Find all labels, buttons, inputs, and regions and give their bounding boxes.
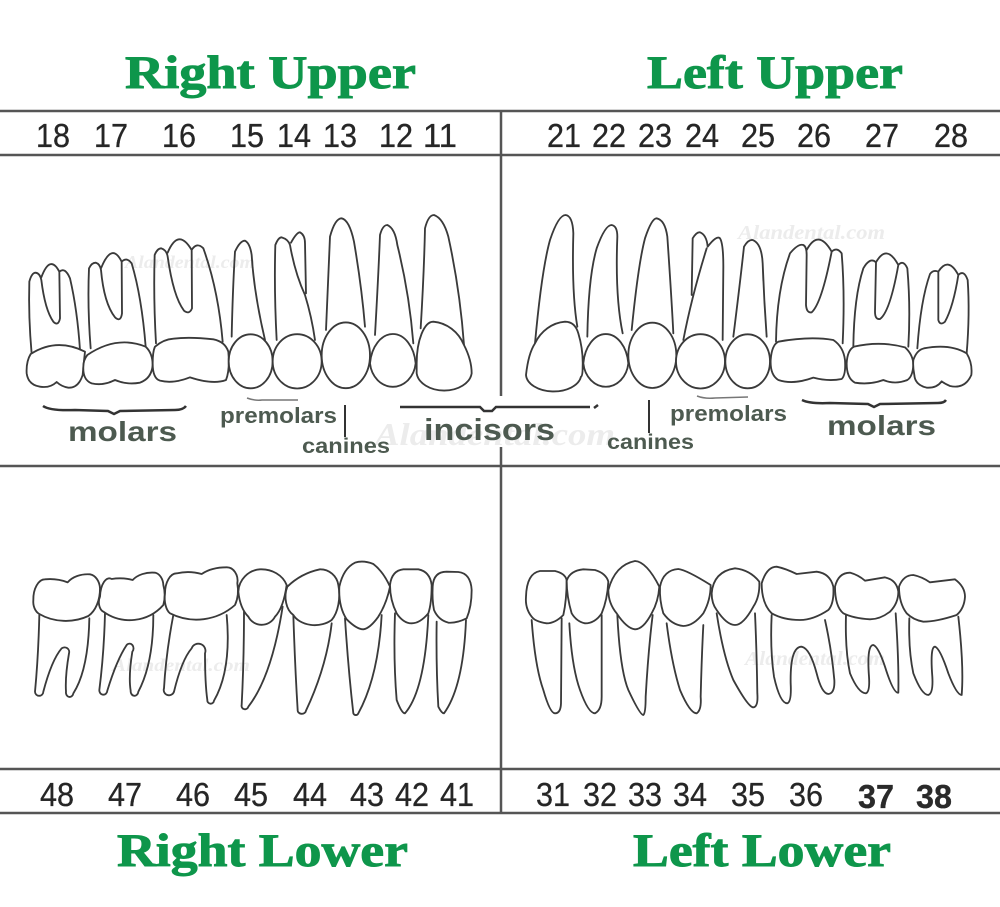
- tooth numbers: lower row: 41: [440, 776, 474, 813]
- heading: Left Upper: Left Upper: [647, 47, 903, 99]
- tooth numbers: upper row: 26: [797, 117, 831, 154]
- tooth numbers: lower row: 35: [731, 776, 765, 813]
- label: molars right upper: molars: [68, 416, 177, 447]
- tooth 26: [771, 240, 845, 382]
- label: incisors: [400, 405, 598, 447]
- tooth 21: [526, 215, 583, 391]
- tooth numbers: lower row: 46: [176, 776, 210, 813]
- tooth numbers: upper row: 25: [741, 117, 775, 154]
- tooth numbers: lower row: 47: [108, 776, 142, 813]
- tooth numbers: upper row: 13: [323, 117, 357, 154]
- tooth 13: [322, 218, 370, 388]
- tooth numbers: upper row: 23: [638, 117, 672, 154]
- upper right quadrant teeth: [27, 215, 472, 391]
- heading: Right Lower: Right Lower: [117, 825, 408, 877]
- tooth 18: [27, 264, 85, 388]
- tooth 34: [660, 569, 711, 713]
- tooth numbers: lower row: 32: [583, 776, 617, 813]
- lower right quadrant teeth: [33, 562, 472, 715]
- tooth 14: [273, 232, 322, 389]
- chart grid lines: [0, 111, 1000, 813]
- tooth 11: [417, 215, 472, 391]
- tooth 37: [835, 573, 898, 693]
- tooth numbers: upper row: 22: [592, 117, 626, 154]
- lower left quadrant teeth: [526, 561, 965, 715]
- tooth numbers: upper row: 17: [94, 117, 128, 154]
- tooth 28: [913, 265, 972, 388]
- tooth 12: [370, 225, 416, 387]
- tooth 15: [229, 241, 273, 388]
- tooth numbers: upper row: 24: [685, 117, 719, 154]
- tooth 36: [762, 567, 834, 703]
- tooth numbers: lower row: [40, 776, 952, 815]
- tooth 35: [712, 568, 759, 707]
- label: canines right upper: [302, 405, 390, 458]
- upper left quadrant teeth: [526, 215, 972, 391]
- tooth numbers: lower row: 36: [789, 776, 823, 813]
- heading: Right Upper: Right Upper: [125, 47, 416, 99]
- tooth 42: [390, 569, 432, 713]
- tooth numbers: lower row: 34: [673, 776, 707, 813]
- label: molars right upper: [43, 406, 186, 447]
- tooth numbers: lower row: 48: [40, 776, 74, 813]
- tooth 24: [676, 232, 725, 388]
- label: canines right upper: canines: [302, 435, 390, 458]
- tooth numbers: lower row: 43: [350, 776, 384, 813]
- tooth numbers: upper row: [36, 117, 968, 154]
- tooth 27: [847, 253, 913, 383]
- label: canines left upper: canines: [607, 431, 694, 454]
- tooth 47: [99, 573, 165, 696]
- label: premolars left upper: premolars: [670, 401, 787, 426]
- tooth 17: [83, 253, 153, 384]
- tooth 31: [526, 571, 567, 713]
- tooth numbers: upper row: 28: [934, 117, 968, 154]
- tooth 22: [583, 225, 628, 387]
- tooth 32: [567, 569, 608, 713]
- watermarks: Alandental.com: [373, 416, 615, 452]
- tooth 33: [608, 561, 659, 715]
- watermarks: Alandental.com: [743, 648, 885, 670]
- tooth numbers: lower row: 44: [293, 776, 327, 813]
- watermarks: [111, 222, 885, 675]
- tooth numbers: lower row: 33: [628, 776, 662, 813]
- tooth numbers: lower row: 37: [858, 778, 894, 815]
- label: premolars right upper: premolars: [220, 403, 337, 428]
- label: molars left upper: molars: [827, 410, 936, 441]
- tooth 16: [153, 239, 229, 382]
- tooth numbers: upper row: 11: [423, 117, 457, 154]
- tooth numbers: lower row: 42: [395, 776, 429, 813]
- tooth numbers: lower row: 38: [916, 778, 952, 815]
- tooth 43: [339, 562, 390, 715]
- tooth 46: [164, 567, 238, 704]
- tooth numbers: lower row: 31: [536, 776, 570, 813]
- tooth 38: [899, 575, 965, 695]
- tooth numbers: upper row: 27: [865, 117, 899, 154]
- tooth numbers: upper row: 18: [36, 117, 70, 154]
- tooth numbers: lower row: 45: [234, 776, 268, 813]
- tooth numbers: upper row: 21: [547, 117, 581, 154]
- heading: Left Lower: Left Lower: [633, 825, 891, 877]
- tooth numbers: upper row: 14: [277, 117, 311, 154]
- tooth 44: [285, 569, 339, 714]
- tooth numbers: upper row: 12: [379, 117, 413, 154]
- watermarks: Alandental.com: [736, 222, 885, 244]
- label: molars left upper: [802, 400, 946, 441]
- watermarks: Alandental.com: [124, 252, 255, 272]
- tooth 41: [432, 572, 472, 713]
- tooth 23: [628, 218, 676, 388]
- watermarks: Alandental.com: [111, 655, 250, 675]
- tooth 48: [33, 574, 100, 697]
- label: canines left upper: [607, 400, 694, 454]
- label: incisors: incisors: [424, 412, 555, 447]
- tooth numbers: upper row: 16: [162, 117, 196, 154]
- tooth numbers: upper row: 15: [230, 117, 264, 154]
- tooth 25: [725, 240, 770, 388]
- tooth 45: [238, 569, 287, 709]
